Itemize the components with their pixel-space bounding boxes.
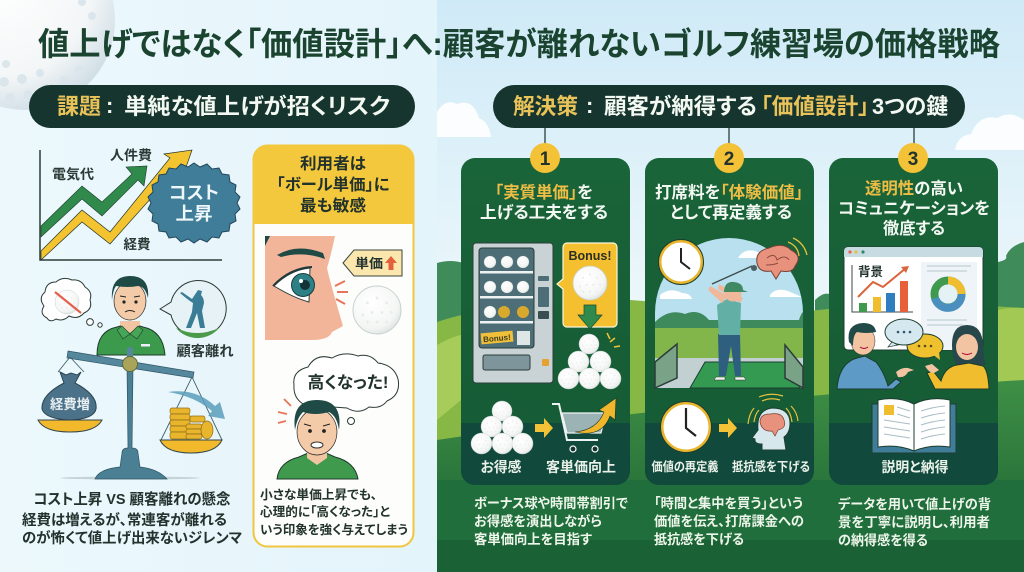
icon: woman listener	[925, 325, 989, 389]
heading pill: solution: :	[586, 93, 593, 118]
heading pill: problem: 単純な値上げが招くリスク	[124, 94, 390, 119]
heading pill: problem: :	[106, 93, 113, 118]
label: value redefinition: 価値の再定義	[652, 459, 719, 474]
panel 3 heading: 透明性の高い	[865, 178, 963, 198]
badge: number 3	[898, 143, 928, 173]
panel 3 caption	[838, 496, 991, 548]
icon: head with brain	[748, 394, 798, 450]
arrow: green cost line	[41, 166, 147, 237]
panel 1: raise effective price	[461, 143, 630, 485]
decoration: golf ball top left	[0, 0, 115, 110]
label: explanation and acceptance: 説明と納得	[882, 459, 948, 475]
badge: number 3: 3	[908, 149, 918, 170]
callout: bonus ball: Bonus!	[568, 249, 612, 263]
card caption: いう印象を強く与えてしまう	[260, 522, 408, 537]
label: value feeling: お得感	[480, 459, 522, 475]
icon: golf ball	[353, 286, 401, 334]
panel 2 caption	[654, 495, 804, 547]
icon: balance scale	[38, 347, 225, 480]
arrow	[535, 418, 553, 438]
label: reduce resistance: 抵抗感を下げる	[732, 459, 810, 474]
icon: shopping cart with rising arrow	[552, 398, 616, 452]
card heading: 利用者は	[300, 155, 366, 173]
left pan	[38, 420, 102, 432]
tag: unit price up: 単価	[355, 256, 383, 271]
icon: man presenter	[837, 323, 914, 389]
icon: speech bubbles	[885, 319, 943, 360]
icon: value balls	[471, 401, 533, 454]
thought bubble: got expensive	[294, 354, 399, 424]
bar chart	[852, 265, 913, 312]
panel 2 caption: 価値を伝え、打席課金への	[654, 513, 804, 529]
left caption heading: コスト上昇 VS 顧客離れの懸念	[34, 490, 230, 508]
label: customer loss: 顧客離れ	[176, 343, 234, 359]
panel 3 caption: の納得感を得る	[838, 532, 928, 548]
panel 1 heading: 上げる工夫をする	[480, 203, 608, 222]
card heading: 「ボール単価」に	[276, 175, 390, 194]
badge: number 1: 1	[540, 149, 551, 170]
label: expenses: 経費	[124, 236, 150, 252]
heading pill: solution: 解決策	[513, 94, 578, 119]
title: 値上げではなく「価値設計」へ:顧客が離れないゴルフ練習場の価格戦略	[38, 26, 1000, 62]
illustration: vending machine: Bonus!	[483, 333, 511, 344]
icon: brain	[757, 238, 807, 279]
arrow: scale tipping	[168, 391, 225, 419]
panel 3: transparent communication	[829, 143, 998, 485]
label: spend per customer up: 客単価向上	[546, 459, 616, 475]
label: background: 背景	[858, 264, 883, 279]
expense bag	[42, 372, 96, 420]
card caption: 小さな単価上昇でも、	[260, 487, 377, 502]
illustration: presentation screen	[844, 247, 983, 350]
panel 1 heading	[480, 183, 608, 222]
red emphasis rays	[335, 281, 348, 304]
panel 1 caption: ボーナス球や時間帯割引で	[474, 495, 628, 511]
label: electricity: 電気代	[52, 166, 95, 182]
badge: number 1	[530, 143, 560, 173]
connectors from solution pill to number badges	[545, 128, 914, 146]
chart: rising costs	[40, 147, 222, 260]
callout: bonus ball	[557, 243, 617, 329]
icon: clock	[658, 240, 704, 284]
panel 3 caption: 景を丁寧に説明し、利用者	[838, 514, 990, 530]
icon: thought bubble, crossed ball	[41, 278, 102, 327]
panel 2: redefine experience value	[645, 143, 814, 485]
panel 2 heading: 打席料を「体験価値」	[655, 182, 803, 202]
panel: price sensitivity card	[253, 145, 414, 546]
coins	[170, 408, 213, 439]
right pan	[160, 440, 222, 453]
badge: number 2: 2	[724, 149, 734, 170]
heading pill: solution: 3つの鍵	[872, 94, 948, 119]
badge: number 2	[714, 143, 744, 173]
badge: cost increase	[148, 163, 240, 243]
left caption body: 経費は増えるが、常連客が離れる	[22, 511, 227, 529]
card caption	[260, 487, 408, 537]
heading pill: problem: 課題	[57, 94, 101, 119]
panel 1 caption	[474, 495, 628, 547]
background: right golf course landscape	[437, 0, 1024, 572]
background: left panel	[0, 0, 438, 572]
thought bubble: got expensive: 高くなった!	[308, 372, 388, 392]
panel 3 heading: 徹底する	[883, 219, 945, 238]
illustration: face looking at ball	[265, 236, 402, 340]
panel 1 heading: 「実質単価」を	[495, 183, 593, 202]
icon: worried staff person	[97, 276, 165, 355]
panel 3 heading: コミュニケーションを	[838, 199, 990, 218]
heading pill: solution: 顧客が納得する	[604, 94, 757, 119]
panel 1 caption: 客単価向上を目指す	[474, 531, 592, 547]
panel 2 heading	[655, 182, 803, 222]
expense bag: 経費増	[50, 396, 90, 412]
arrow: yellow cost line	[41, 150, 192, 260]
icon: ball pyramid with sparkle	[558, 333, 621, 389]
left caption body: のが怖くて値上げ出来ないジレンマ	[22, 529, 242, 547]
heading pill: problem	[29, 85, 415, 128]
label: labor: 人件費	[110, 147, 152, 163]
panel 1 caption: お得感を演出しながら	[474, 513, 602, 529]
icon: golfer leaving bubble	[160, 281, 226, 338]
card heading: 最も敏感	[300, 196, 366, 215]
panel 2 heading: として再定義する	[670, 203, 792, 222]
badge: cost increase: コスト	[169, 183, 219, 203]
illustration: golfer at driving range	[655, 238, 811, 388]
golfer	[708, 265, 757, 380]
card heading	[276, 155, 390, 215]
arrow	[719, 418, 737, 438]
heading pill: solution	[493, 85, 965, 128]
icon: surprised person	[277, 399, 358, 479]
left caption body	[22, 511, 242, 547]
badge: cost increase: 上昇	[176, 204, 212, 224]
icon: open book	[872, 399, 956, 453]
heading pill: solution: 「価値設計」	[761, 94, 869, 119]
panel 2 caption: 「時間と集中を買う」という	[654, 495, 803, 511]
card caption: 心理的に「高くなった」と	[260, 504, 390, 519]
panel 3 caption: データを用いて値上げの背	[838, 496, 991, 512]
icon: large clock	[660, 402, 712, 452]
panel 3 heading	[838, 178, 990, 238]
donut chart	[934, 280, 962, 308]
illustration: vending machine	[473, 243, 553, 383]
panel 2 caption: 抵抗感を下げる	[654, 531, 744, 547]
